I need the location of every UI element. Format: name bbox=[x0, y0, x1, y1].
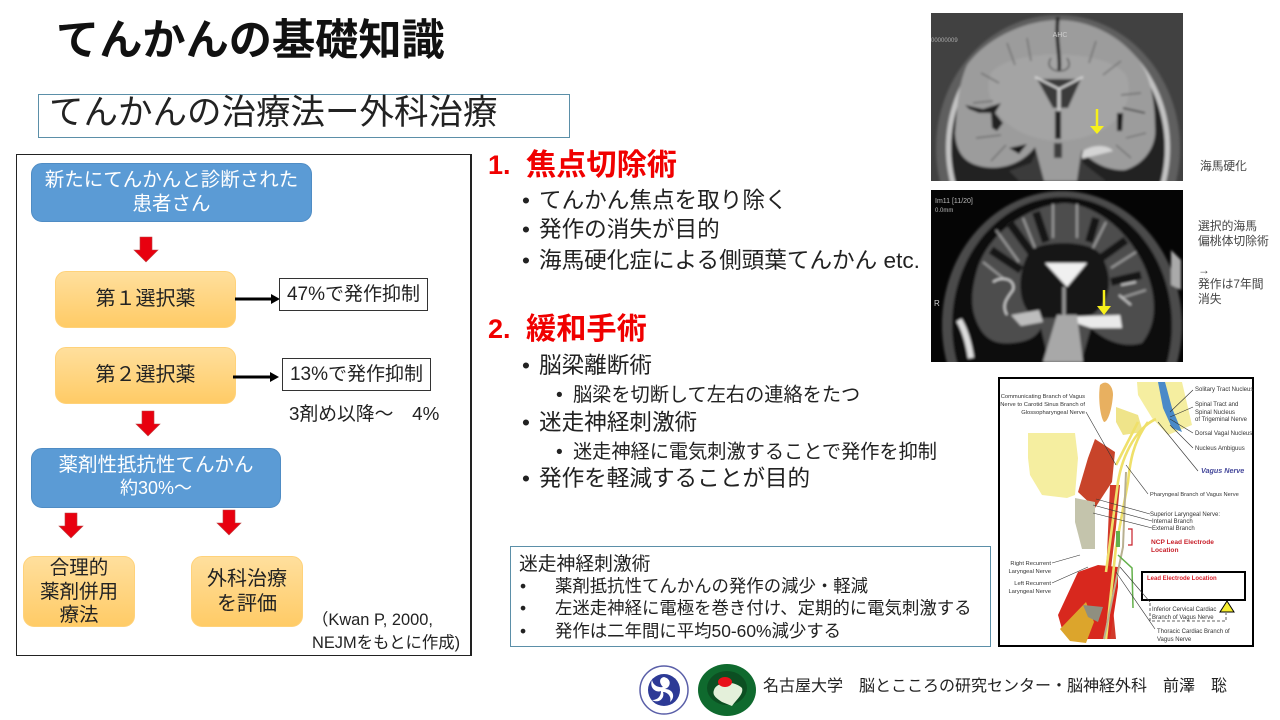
section 2 bullets: 発作を軽減することが目的 bbox=[539, 466, 810, 491]
title: てんかんの基礎知識 bbox=[56, 17, 445, 65]
section 1 bullets: • bbox=[522, 217, 530, 242]
section 1 heading: 焦点切除術 bbox=[526, 149, 677, 182]
image: vagus nerve anatomy: Nucleus Ambiguus bbox=[1195, 446, 1245, 452]
section 1 heading: 1. bbox=[488, 150, 511, 180]
image: vagus nerve anatomy: Lead Electrode Location bbox=[1147, 576, 1217, 582]
image: vagus nerve anatomy: Inferior Cervical Cardiac bbox=[1152, 607, 1216, 613]
section 1 bullets: 海馬硬化症による側頭葉てんかん etc. bbox=[539, 248, 920, 273]
subtitle box: てんかんの治療法ー外科治療 bbox=[49, 94, 498, 132]
arrow: down 4 bbox=[216, 510, 242, 536]
image: T2 MRI: 0.0mm bbox=[935, 208, 953, 214]
flow: rational polytherapy: 薬剤併用 bbox=[40, 580, 118, 602]
image: T2 MRI: Im11 [11/20] bbox=[935, 198, 973, 205]
image: vagus nerve anatomy: Vagus Nerve bbox=[1201, 466, 1244, 475]
callout: vagus nerve stimulation: • bbox=[520, 621, 526, 641]
callout: vagus nerve stimulation bbox=[510, 546, 991, 647]
flow: surgical evaluation: 外科治療 bbox=[207, 568, 287, 590]
image: vagus nerve anatomy: Pharyngeal Branch of Vagus Nerve bbox=[1150, 492, 1239, 498]
footer: affiliation: 名古屋大学 脳とこころの研究センター・脳神経外科 前澤 聡 bbox=[763, 678, 1227, 695]
arrow: second-line result bbox=[233, 372, 279, 382]
section 2 bullets: 迷走神経に電気刺激することで発作を抑制 bbox=[573, 442, 937, 463]
section 2 bullets: • bbox=[522, 466, 530, 491]
arrow: first-line result bbox=[235, 294, 279, 304]
arrow: down 1 bbox=[133, 236, 159, 262]
result: 13%: 13%で発作抑制 bbox=[290, 364, 423, 385]
image: vagus nerve anatomy: Vagus Nerve bbox=[1157, 637, 1192, 643]
section 2 bullets: • bbox=[522, 353, 530, 378]
image: vagus nerve anatomy: Laryngeal Nerve bbox=[1008, 589, 1051, 595]
callout: vagus nerve stimulation: • bbox=[520, 598, 526, 618]
image: vagus nerve anatomy: Spinal Tract and bbox=[1195, 402, 1238, 408]
section 2 heading: 2. bbox=[488, 314, 511, 344]
panel: treatment flowchart bbox=[16, 154, 472, 656]
flow: second-line drug: 第２選択薬 bbox=[96, 364, 196, 386]
flow: surgical evaluation: を評価 bbox=[217, 593, 277, 615]
image: vagus nerve anatomy: of Trigeminal Nerve bbox=[1195, 417, 1248, 423]
result: 47%: 47%で発作抑制 bbox=[287, 284, 420, 305]
image: vagus nerve anatomy: Thoracic Cardiac Branch of bbox=[1157, 629, 1230, 635]
image: vagus nerve anatomy bbox=[998, 377, 1254, 647]
image: FLAIR MRI: 00000009 bbox=[931, 38, 958, 44]
image: vagus nerve anatomy: Solitary Tract Nucleus bbox=[1195, 387, 1253, 393]
section 2 bullets: • bbox=[556, 385, 563, 406]
flow: drug-resistant epilepsy: 薬剤性抵抗性てんかん bbox=[58, 454, 254, 476]
image: vagus nerve anatomy: Glossopharyngeal Nerve bbox=[1021, 410, 1085, 416]
image: T2 MRI: R bbox=[934, 299, 940, 308]
flow: rational polytherapy bbox=[23, 556, 135, 627]
flow: first-line drug: 第１選択薬 bbox=[96, 288, 196, 310]
section 2 bullets: 迷走神経刺激術 bbox=[539, 410, 697, 435]
callout: vagus nerve stimulation: 薬剤抵抗性てんかんの発作の減少・軽減 bbox=[555, 576, 868, 596]
section 2 bullets bbox=[522, 353, 937, 491]
section 1 bullets: てんかん焦点を取り除く bbox=[539, 188, 788, 213]
flow: newly diagnosed: 患者さん bbox=[132, 193, 210, 215]
flow: rational polytherapy: 合理的 bbox=[50, 557, 108, 579]
caption: surgery outcome: 選択的海馬 偏桃体切除術 → 発作は7年間 消失 bbox=[1198, 219, 1269, 306]
flow: surgical evaluation bbox=[191, 556, 303, 627]
image: vagus nerve anatomy: Internal Branch bbox=[1152, 519, 1193, 525]
caption: hippocampal sclerosis: 海馬硬化 bbox=[1200, 160, 1247, 173]
section 2 bullets: 脳梁離断術 bbox=[539, 353, 652, 378]
callout: vagus nerve stimulation: 左迷走神経に電極を巻き付け、定期的に電気刺激する bbox=[555, 598, 972, 618]
flow: first-line drug bbox=[55, 271, 236, 328]
flow: newly diagnosed bbox=[31, 163, 312, 222]
arrow: down 2 bbox=[135, 410, 161, 436]
flow: newly diagnosed: 新たにてんかんと診断された bbox=[45, 169, 298, 191]
flow: drug-resistant epilepsy: 約30%～ bbox=[120, 478, 192, 498]
image: vagus nerve anatomy: Right Recurrent bbox=[1010, 561, 1051, 567]
image: vagus nerve anatomy: Location bbox=[1151, 547, 1178, 554]
logo: brain and mind center bbox=[698, 664, 756, 716]
image: vagus nerve anatomy: NCP Lead Electrode bbox=[1151, 539, 1214, 546]
callout: vagus nerve stimulation: 発作は二年間に平均50-60%減少する bbox=[555, 621, 841, 641]
citation: （Kwan P, 2000, NEJMをもとに作成) bbox=[312, 611, 460, 652]
section 2 heading: 緩和手術 bbox=[526, 313, 647, 346]
image: vagus nerve anatomy: Spinal Nucleus bbox=[1195, 410, 1235, 416]
section 2 bullets: 脳梁を切断して左右の連絡をたつ bbox=[573, 385, 860, 406]
flow: second-line drug bbox=[55, 347, 236, 404]
section 1 bullets bbox=[522, 188, 920, 273]
image: vagus nerve anatomy: Left Recurrent bbox=[1014, 581, 1051, 587]
image: vagus nerve anatomy: Communicating Branch of Vagus bbox=[1001, 394, 1085, 400]
anatomy drawing bbox=[1028, 382, 1192, 643]
section 1 bullets: 発作の消失が目的 bbox=[539, 217, 720, 242]
section 1 bullets: • bbox=[522, 248, 530, 273]
callout: vagus nerve stimulation: 迷走神経刺激術 bbox=[519, 553, 650, 574]
flow: drug-resistant epilepsy bbox=[31, 448, 281, 508]
image: vagus nerve anatomy: External Branch bbox=[1152, 526, 1195, 532]
result: 13% bbox=[282, 358, 431, 391]
image: FLAIR MRI: AHC bbox=[1053, 32, 1067, 39]
image: vagus nerve anatomy: Nerve to Carotid Sinus Branch of bbox=[1000, 402, 1085, 408]
image: vagus nerve anatomy: Branch of Vagus Nerve bbox=[1152, 615, 1214, 621]
image: T2 MRI bbox=[931, 190, 1183, 362]
flow: rational polytherapy: 療法 bbox=[59, 604, 98, 626]
section 2 bullets: • bbox=[556, 442, 563, 463]
image: vagus nerve anatomy: Superior Laryngeal Nerve: bbox=[1150, 512, 1220, 518]
callout: vagus nerve stimulation: • bbox=[520, 576, 526, 596]
result: 47% bbox=[279, 278, 428, 311]
note: third drug onward: 3剤め以降～ 4% bbox=[289, 403, 439, 424]
arrow: down 3 bbox=[58, 512, 84, 538]
image: FLAIR MRI bbox=[931, 13, 1183, 181]
logo: Nagoya University bbox=[639, 665, 689, 715]
image: vagus nerve anatomy: Laryngeal Nerve bbox=[1008, 569, 1051, 575]
section 1 bullets: • bbox=[522, 188, 530, 213]
image: vagus nerve anatomy: Dorsal Vagal Nucleus bbox=[1195, 431, 1252, 437]
section 2 bullets: • bbox=[522, 410, 530, 435]
